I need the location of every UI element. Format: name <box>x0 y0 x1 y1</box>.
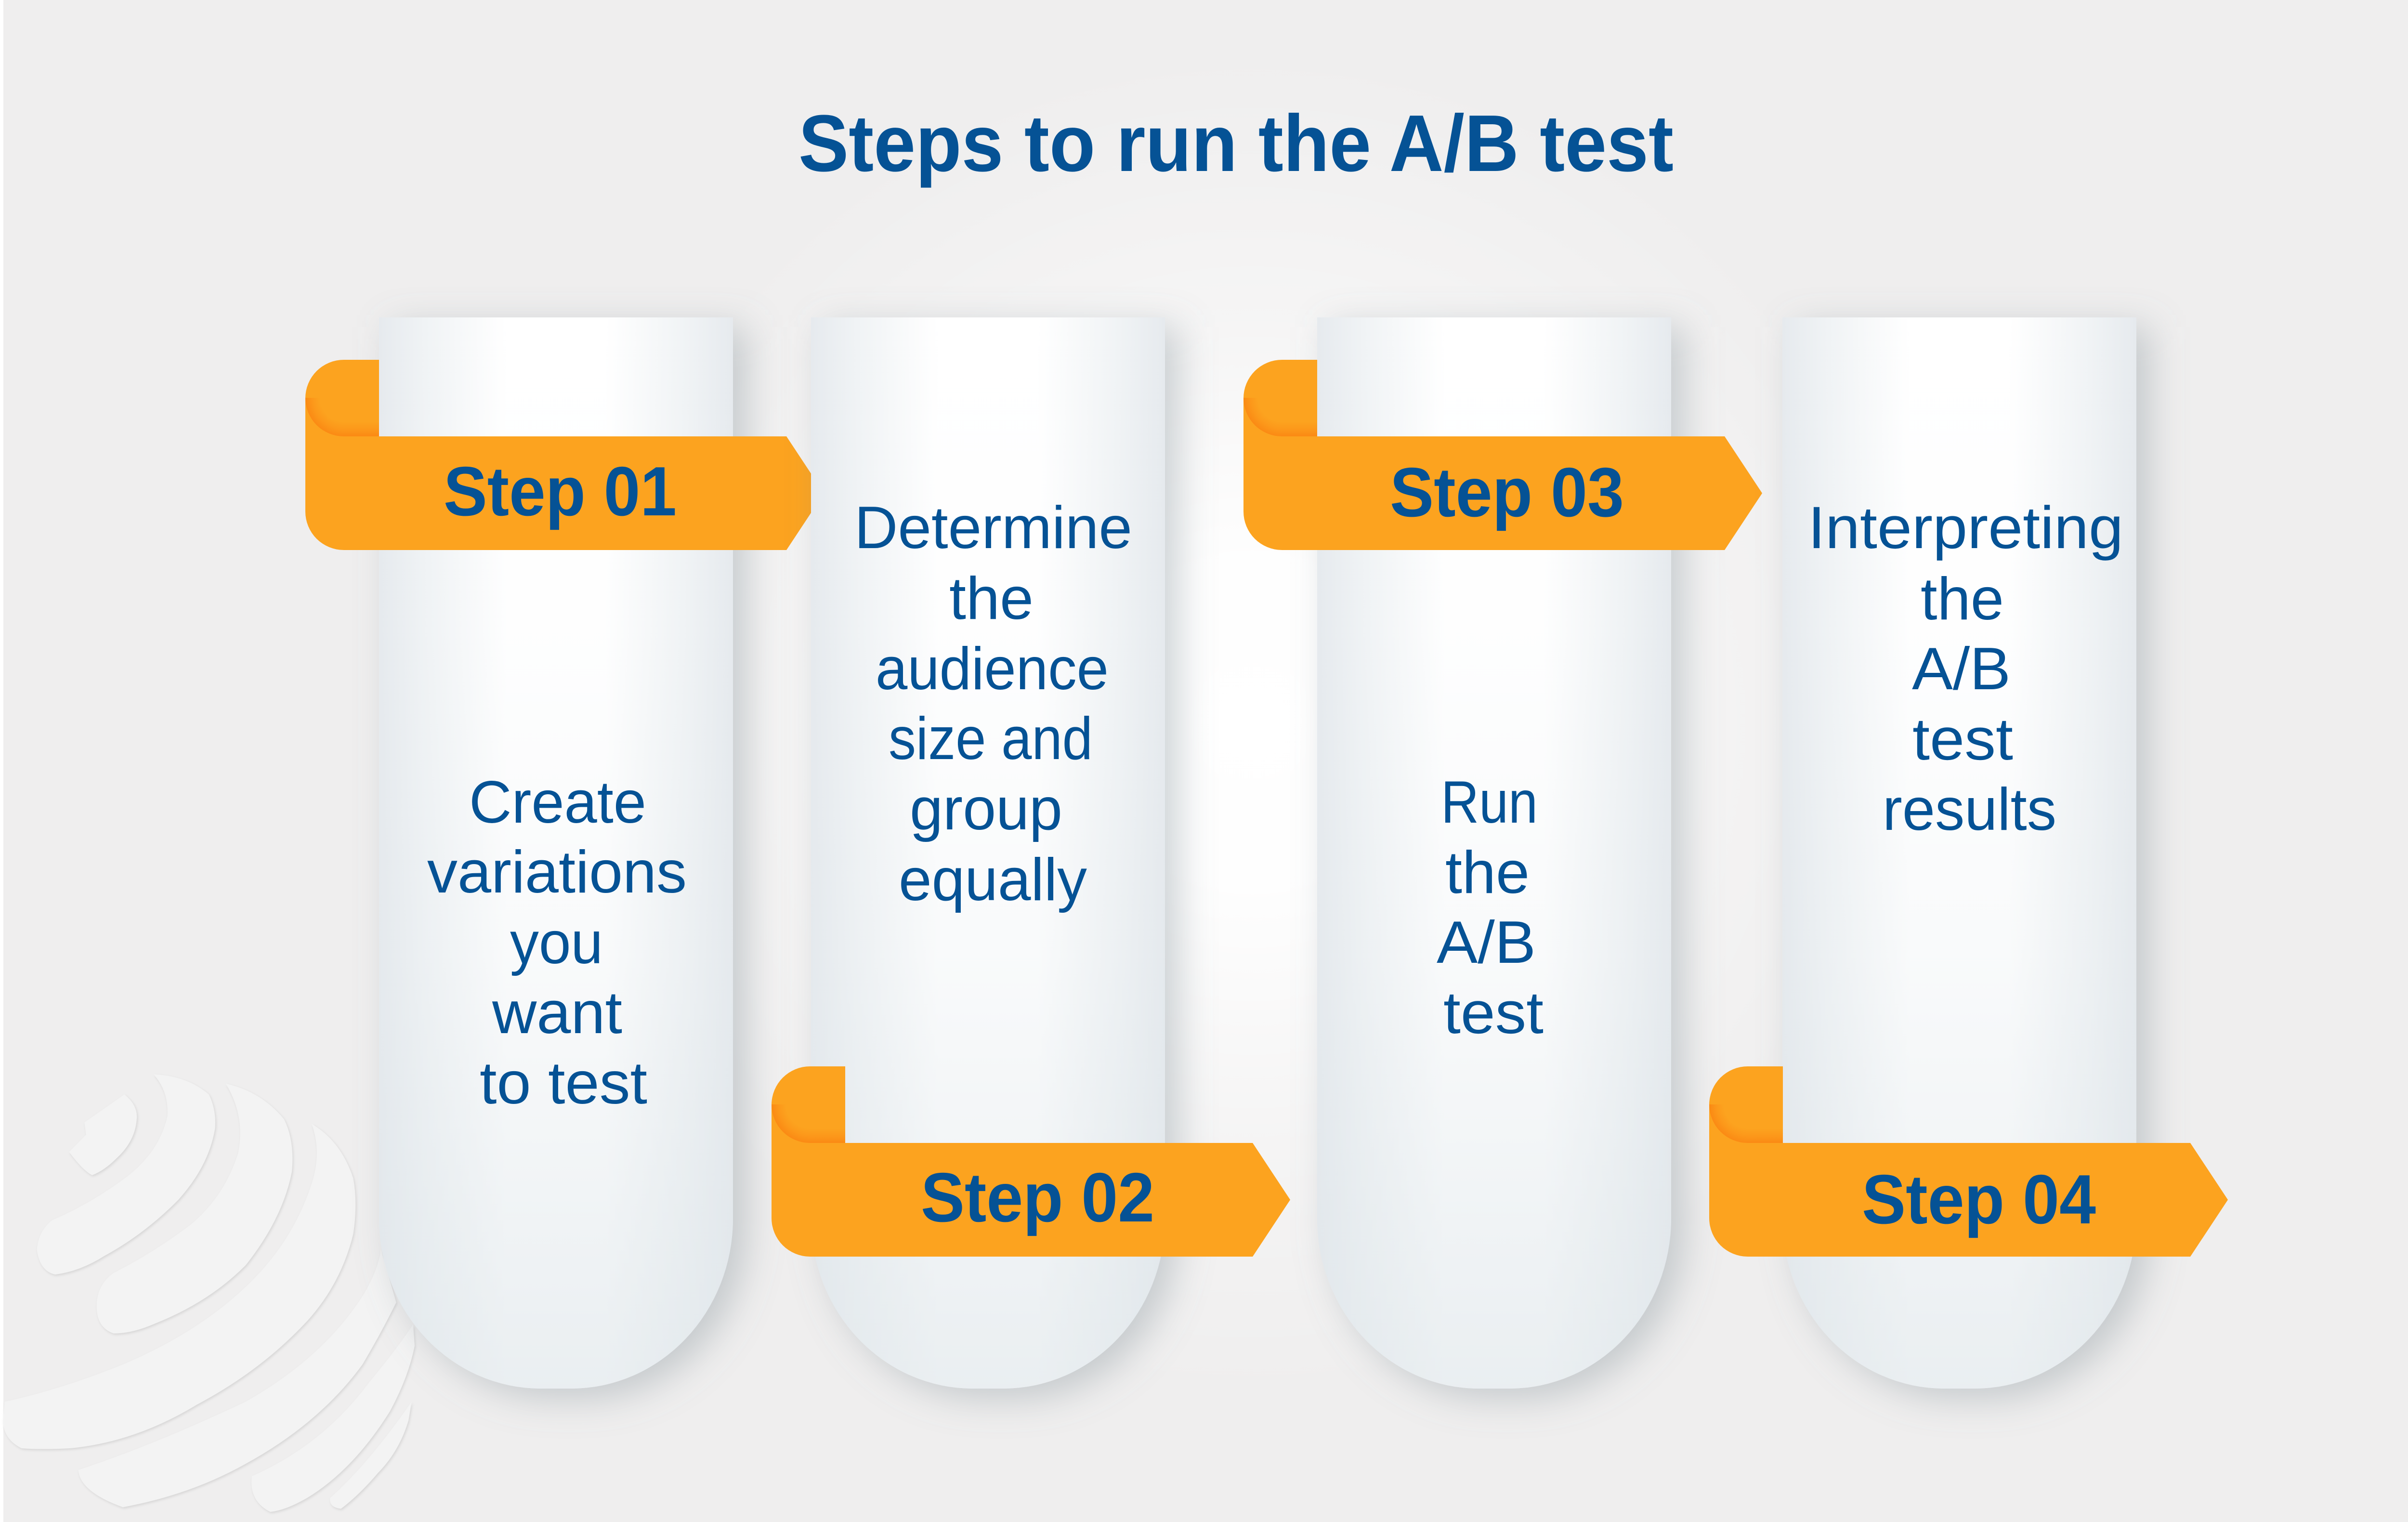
text: step 04 description: results <box>1883 776 2056 843</box>
text: step 03 description: test <box>1443 980 1544 1046</box>
text: step 02 description: size and <box>889 706 1093 772</box>
banner: step 03 <box>1243 360 1762 550</box>
text: step 03 description <box>1437 769 1544 1046</box>
text: step 02 description: audience <box>876 636 1109 702</box>
panel: step 03 column <box>1317 317 1685 1398</box>
text: step 03 description: Run <box>1441 769 1538 836</box>
banner: step 02 <box>772 1066 1290 1257</box>
text: step 01 description: to test <box>480 1050 647 1116</box>
text: step 02 description: Determine <box>854 495 1132 561</box>
text: step 01 description: Create <box>469 769 646 836</box>
text: step 04 description: the <box>1921 566 2004 632</box>
text: step 04 description: A/B <box>1912 636 2011 702</box>
label: step 02: Step 02 <box>921 1158 1154 1236</box>
text: step 02 description: the <box>949 565 1034 632</box>
label: step 01: Step 01 <box>444 452 677 530</box>
label: step 03: Step 03 <box>1390 453 1624 531</box>
text: step 02 description: equally <box>899 847 1087 913</box>
banner: step 04 <box>1709 1066 2228 1257</box>
panel: step 01 column <box>379 317 746 1398</box>
text: step 03 description: the <box>1445 840 1530 906</box>
label: step 04: Step 04 <box>1862 1160 2096 1238</box>
text: step 01 description: variations <box>427 839 687 905</box>
text: step 02 description: group <box>910 776 1062 842</box>
text: step 03 description: A/B <box>1437 909 1536 976</box>
text: step 04 description: test <box>1912 706 2013 773</box>
title: Steps to run the A/B test <box>798 99 1674 188</box>
text: step 04 description <box>1808 495 2123 843</box>
text: step 04 description: Interpreting <box>1808 495 2123 561</box>
text: step 01 description <box>427 769 687 1116</box>
panel: step 02 column <box>811 317 1178 1398</box>
panel: step 04 column <box>1782 317 2150 1398</box>
banner: step 01 <box>305 360 824 550</box>
text: step 01 description: want <box>492 980 622 1046</box>
decorative globe graphic <box>3 1075 415 1512</box>
text: step 01 description: you <box>510 910 603 976</box>
text: step 02 description <box>854 495 1132 913</box>
